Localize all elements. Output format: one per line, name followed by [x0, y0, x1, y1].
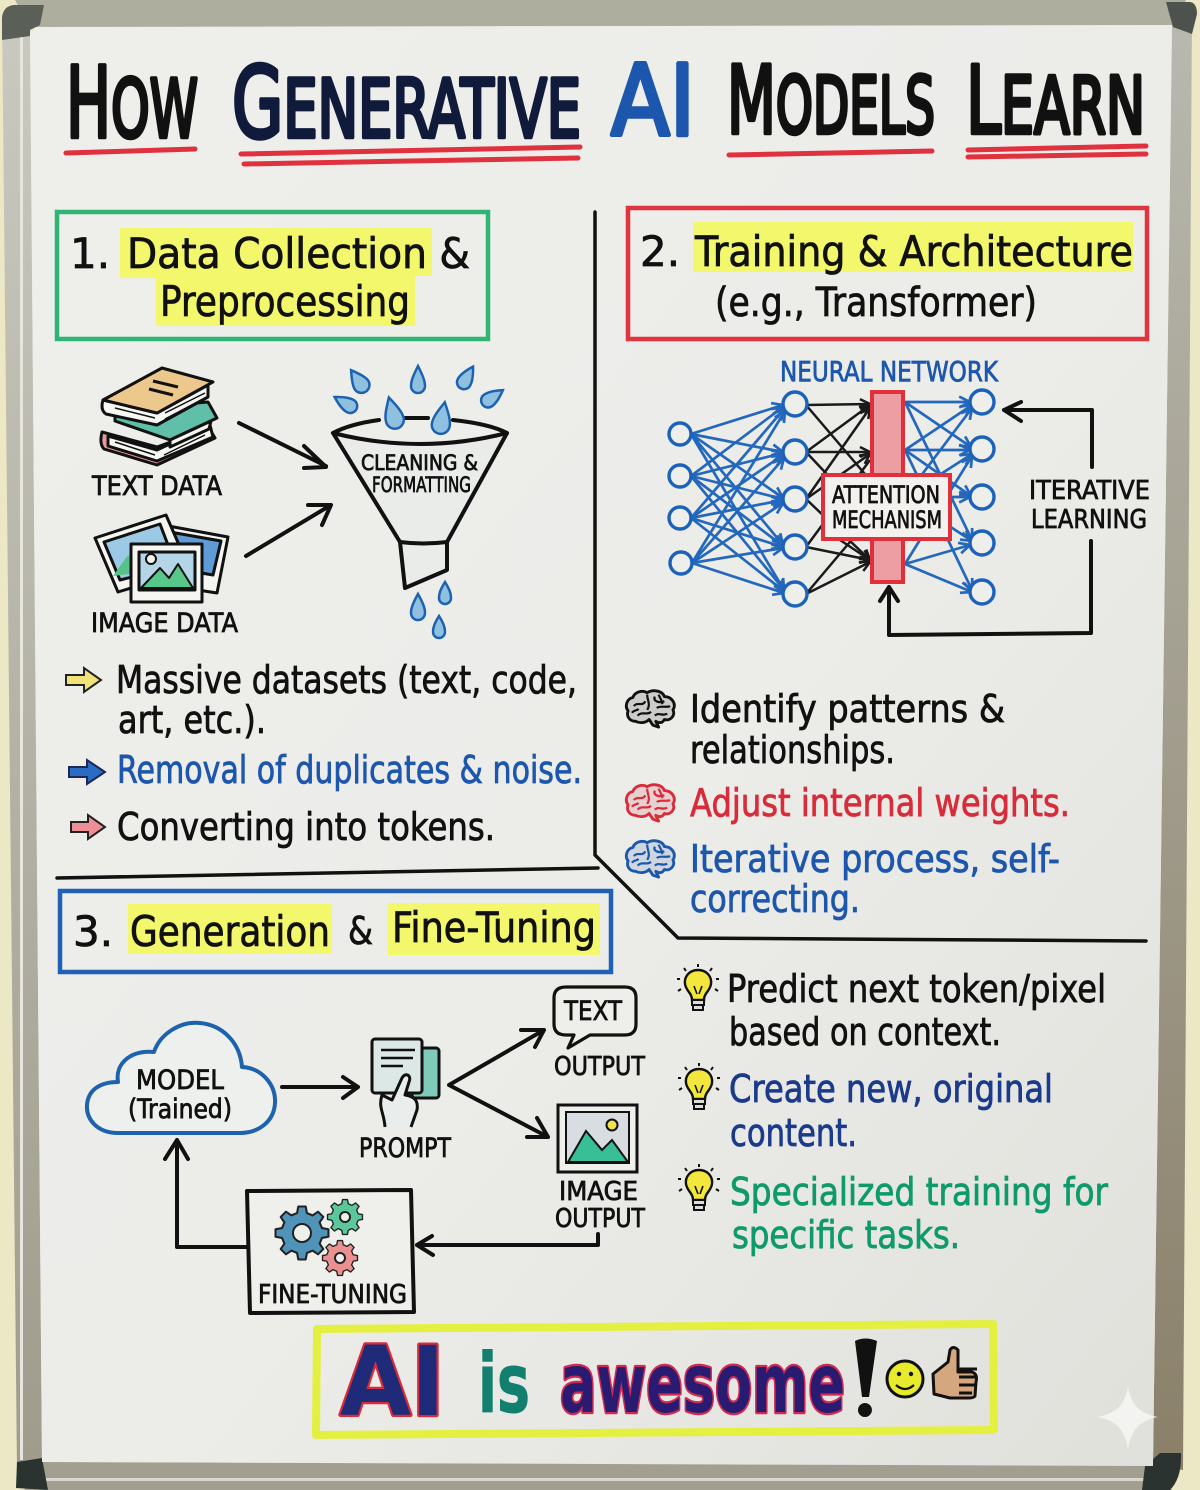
bullet list: data collection: Converting into tokens. [117, 805, 495, 849]
icon: brain red [626, 785, 674, 821]
icon: stacked books [101, 368, 217, 465]
icon: image stack [95, 515, 228, 602]
panel: generation and fine-tuning: Fine-Tuning [392, 903, 596, 952]
chart: neural network diagram: MECHANISM [832, 506, 942, 534]
bullet text: generation: Specialized training for [730, 1170, 1108, 1214]
label: image output: IMAGE [559, 1177, 638, 1207]
label: text in bubble: TEXT [563, 996, 622, 1027]
arrow: iterative loop to output [1004, 402, 1092, 467]
box: fine-tuning [247, 1190, 414, 1313]
label: fine-tuning: FINE-TUNING [258, 1280, 407, 1310]
label: text data: TEXT DATA [91, 471, 222, 502]
heading box [60, 891, 611, 972]
arrows: prompt to outputs [449, 1030, 548, 1137]
bullet text: generation: based on context. [729, 1010, 1001, 1054]
title underlines [66, 146, 1146, 164]
icon: brain blue [626, 841, 674, 877]
arrow bullet pink [71, 815, 105, 839]
icon: text speech bubble [554, 987, 636, 1048]
bullet text: generation: content. [730, 1111, 857, 1155]
bullet text: training: Iterative process, self- [690, 837, 1060, 881]
attention mechanism box [823, 475, 950, 539]
heading box [57, 212, 488, 339]
neural nodes [669, 390, 994, 606]
panel: data collection and preprocessing [57, 212, 582, 849]
heading box [628, 208, 1147, 339]
arrow: fine-tuning to model [165, 1140, 247, 1247]
callout word: AI: AI [340, 1326, 445, 1438]
bullet text: generation: specific tasks. [732, 1213, 960, 1257]
icon: water drops [331, 363, 507, 638]
panel: generation and fine-tuning [60, 891, 1108, 1313]
callout: AI is awesome [316, 1324, 994, 1438]
bullet text: training: Adjust internal weights. [690, 781, 1070, 825]
panel: generation and fine-tuning: OUTPUT [555, 1204, 645, 1234]
arrow bullet yellow [66, 668, 101, 692]
bullet text: Massive datasets (text, code, [116, 658, 577, 702]
title [66, 45, 1146, 164]
panel: generation and fine-tuning: Generation [130, 907, 330, 956]
label: prompt: PROMPT [359, 1133, 451, 1164]
label: iterative learning: ITERATIVE [1029, 476, 1150, 506]
icon: funnel [333, 418, 507, 588]
icon: bulb one [677, 964, 719, 1010]
title word: How: HOW [66, 47, 198, 161]
arrow bullet blue [69, 760, 105, 784]
panel: generation and fine-tuning: & [348, 909, 373, 953]
chart: neural network diagram [669, 390, 994, 606]
bullet text: generation [727, 967, 1108, 1257]
icon: thumbs up [933, 1348, 977, 1398]
title word: AI: AI [611, 45, 695, 159]
bullet list: data collection: art, etc.). [118, 698, 266, 742]
heading highlight [120, 228, 432, 326]
watermark sparkle [1097, 1386, 1158, 1449]
heading text: 1. [70, 229, 110, 278]
bullet text: generation: Predict next token/pixel [727, 967, 1106, 1011]
arrow: text to funnel [239, 423, 326, 468]
cloud label: MODEL [136, 1065, 224, 1096]
callout word: is: is [478, 1337, 530, 1432]
heading highlights [128, 903, 600, 955]
icon: prompt document and hand [372, 1039, 439, 1127]
title word: Models: MODELS [727, 47, 935, 156]
section dividers [57, 212, 1146, 941]
bullet list: data collection [66, 658, 582, 849]
bullet list: data collection: Removal of duplicates & noise. [117, 748, 582, 792]
arrow: model to prompt [282, 1077, 358, 1098]
panel: training and architecture: LEARNING [1031, 505, 1147, 535]
attention bar [872, 392, 903, 582]
arrow: iterative loop to attention [880, 541, 1091, 635]
heading text: 2. [640, 227, 680, 276]
funnel label: CLEANING & [361, 451, 478, 475]
icon: smiley [887, 1361, 923, 1397]
attention label: ATTENTION [832, 481, 940, 509]
bullet text: training: Identify patterns & [690, 687, 1005, 731]
panel: training and architecture: Training & Architecture [694, 227, 1133, 276]
panel: training and architecture: (e.g., Transformer) [715, 280, 1037, 326]
icon: image output [558, 1105, 637, 1172]
label: neural network: NEURAL NETWORK [780, 355, 999, 388]
title word: Generative: GENERATIVE [232, 47, 581, 161]
bullet text: training: relationships. [690, 728, 895, 772]
label: image data: IMAGE DATA [91, 608, 238, 639]
icon: model cloud [87, 1023, 275, 1133]
label: output text: OUTPUT [554, 1052, 645, 1082]
heading highlight [693, 222, 1133, 272]
panel: data collection and preprocessing: Preprocessing [160, 277, 410, 326]
bullet text: training [690, 687, 1070, 921]
panel: training and architecture [626, 208, 1150, 921]
bullet text: training: correcting. [690, 877, 860, 921]
icon: bulb two [678, 1063, 720, 1109]
callout word: awesome: awesome [560, 1337, 845, 1432]
arrow: image output to fine-tuning [417, 1234, 598, 1255]
icon: brain black [626, 691, 674, 727]
icon: funnel: FORMATTING [372, 473, 471, 497]
panel: data collection and preprocessing: Data Collection & [127, 229, 470, 278]
icon: gears [276, 1200, 362, 1275]
heading text: 3. [73, 907, 113, 956]
callout exclamation mark [855, 1338, 877, 1417]
arrow: images to funnel [246, 505, 331, 556]
panel: generation and fine-tuning: (Trained) [128, 1094, 232, 1125]
icon: bulb three [678, 1164, 720, 1210]
callout border [316, 1324, 994, 1435]
bullet text: generation: Create new, original [729, 1067, 1053, 1111]
